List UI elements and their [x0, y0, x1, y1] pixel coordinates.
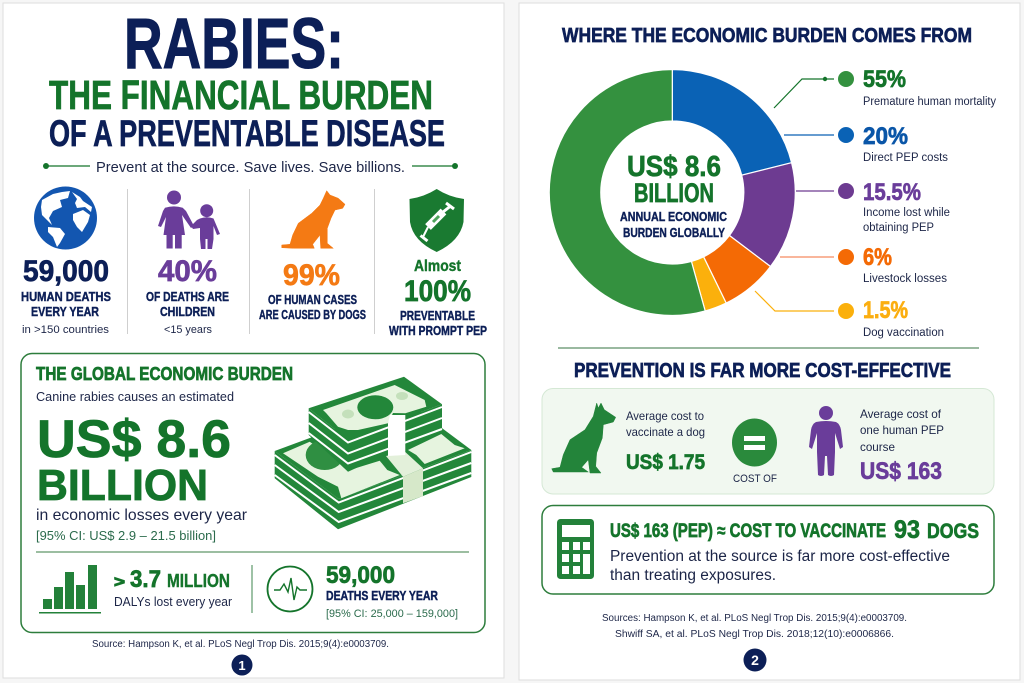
stat: human deaths	[21, 186, 111, 336]
stat: DALYs: DALYs lost every year	[114, 594, 233, 609]
donut centre label: BURDEN GLOBALLY	[623, 226, 726, 240]
legend: income lost: Income lost while	[863, 207, 950, 219]
legend: income lost: obtaining PEP	[863, 222, 934, 234]
legend: income lost	[796, 179, 950, 234]
page number 1	[232, 654, 252, 676]
legend: premature human mortality: Premature human mortality	[863, 96, 996, 108]
stat: dogs: OF HUMAN CASES	[268, 293, 357, 307]
stat: children: 40%	[158, 255, 217, 288]
callout text: US$ 163 (PEP) ≈ COST TO VACCINATE	[610, 521, 886, 542]
stat: human deaths: EVERY YEAR	[31, 304, 99, 319]
legend: income lost: 15.5%	[863, 179, 921, 206]
text: dog vaccination cost: US$ 1.75	[626, 451, 705, 474]
title: THE FINANCIAL BURDEN	[49, 72, 433, 118]
legend: direct PEP costs: Direct PEP costs	[863, 152, 948, 164]
stat: human deaths: HUMAN DEATHS	[21, 289, 111, 304]
sources	[602, 613, 907, 640]
panel: cost comparison	[542, 388, 994, 494]
icon: calculator	[557, 519, 594, 579]
callout text: 93	[894, 516, 920, 544]
text: PEP cost: course	[860, 440, 895, 454]
callout text	[610, 516, 979, 584]
icon: heartbeat circle	[268, 566, 312, 612]
stat: preventable: PREVENTABLE	[400, 309, 475, 323]
icon: orange dog	[282, 191, 345, 248]
stat: preventable	[389, 189, 487, 338]
stat: children: OF DEATHS ARE	[146, 289, 229, 304]
chart: donut	[549, 70, 795, 316]
panel: page 1	[3, 3, 504, 678]
donut centre label: BILLION	[634, 178, 714, 208]
chart: DALY bars icon	[39, 565, 101, 614]
stat: dogs: 99%	[283, 259, 340, 292]
sources: Sources: Hampson K, et al. PLoS Negl Trop Dis. 2015;9(4):e0003709.	[602, 613, 907, 624]
icon: equals	[732, 418, 777, 466]
legend: livestock losses: 6%	[863, 244, 892, 271]
stat: DALYs	[114, 566, 233, 609]
page number 2: 2	[751, 652, 759, 668]
heading: THE GLOBAL ECONOMIC BURDEN	[36, 363, 293, 384]
callout text: Prevention at the source is far more cost-effective	[610, 548, 950, 565]
text: intro: Canine rabies causes an estimated	[36, 389, 234, 404]
stat: deaths: [95% CI: 25,000 – 159,000]	[326, 608, 458, 620]
title: OF A PREVENTABLE DISEASE	[49, 113, 445, 154]
label: cost of: COST OF	[733, 473, 777, 485]
source: Source: Hampson K, et al. PLoS Negl Trop Dis. 2015;9(4):e0003709.	[92, 639, 389, 650]
text: PEP cost	[860, 407, 944, 485]
page number 1: 1	[238, 658, 246, 673]
icon: shield with syringe	[410, 189, 464, 252]
icon: adult and child	[158, 190, 220, 249]
text: losses: [95% CI: US$ 2.9 – 21.5 billion]	[36, 528, 216, 543]
stat: children: <15 years	[164, 324, 212, 336]
stat: DALYs: 3.7	[130, 566, 161, 593]
legend: livestock losses: Livestock losses	[863, 273, 947, 285]
title: RABIES:	[124, 5, 344, 84]
legend: livestock losses	[780, 244, 947, 285]
donut centre label: ANNUAL ECONOMIC	[620, 210, 727, 224]
donut centre label	[620, 151, 727, 240]
icon: globe	[34, 186, 97, 250]
text: PEP cost: US$ 163	[860, 458, 942, 485]
stat: children	[146, 190, 229, 336]
text: dog vaccination cost	[626, 409, 705, 474]
stat: DALYs: MILLION	[167, 571, 230, 591]
panel: global economic burden	[21, 354, 485, 632]
heading: prevention: PREVENTION IS FAR MORE COST-EFFECTIVE	[574, 359, 951, 382]
text: dog vaccination cost: Average cost to	[626, 409, 704, 423]
stat: preventable: Almost	[414, 258, 462, 275]
stat: children: CHILDREN	[160, 304, 215, 319]
legend: dog vaccination: 1.5%	[863, 297, 908, 324]
text: losses	[36, 507, 248, 543]
text: dog vaccination cost: vaccinate a dog	[626, 425, 705, 439]
stat: deaths: 59,000	[326, 562, 395, 589]
legend: premature human mortality	[774, 66, 996, 108]
stat: dogs	[259, 191, 366, 322]
stat: human deaths: in >150 countries	[22, 324, 110, 336]
icon: green dog	[552, 403, 616, 473]
legend: dog vaccination: Dog vaccination	[863, 327, 944, 339]
stat: DALYs: >	[114, 574, 125, 591]
stat: deaths	[326, 562, 458, 620]
legend: direct PEP costs: 20%	[863, 123, 908, 150]
big number: BILLION	[37, 461, 208, 510]
page number 2	[744, 648, 766, 672]
big number	[37, 410, 231, 510]
stat: preventable: 100%	[404, 275, 471, 308]
callout text: DOGS	[927, 520, 979, 543]
title	[49, 5, 445, 154]
icon: stack of money	[275, 377, 471, 529]
legend: direct PEP costs	[784, 123, 948, 164]
legend: dog vaccination	[755, 291, 944, 339]
panel: page 2	[519, 3, 1020, 680]
callout text: than treating exposures.	[610, 567, 776, 584]
icon: person	[809, 406, 843, 476]
tagline: Prevent at the source. Save lives. Save billions.	[96, 159, 405, 176]
stat: dogs: ARE CAUSED BY DOGS	[259, 308, 366, 322]
legend: premature human mortality: 55%	[863, 66, 906, 93]
text: PEP cost: Average cost of	[860, 407, 942, 421]
big number: US$ 8.6	[37, 410, 231, 469]
text: PEP cost: one human PEP	[860, 423, 944, 437]
panel: 93 dogs callout	[542, 506, 994, 594]
stat: preventable: WITH PROMPT PEP	[389, 324, 487, 338]
sources: Shwiff SA, et al. PLoS Negl Trop Dis. 2018;12(10):e0006866.	[615, 629, 894, 640]
text: losses: in economic losses every year	[36, 507, 248, 524]
donut centre label: US$ 8.6	[627, 151, 721, 183]
stat: deaths: DEATHS EVERY YEAR	[326, 589, 438, 603]
stat: human deaths: 59,000	[23, 255, 109, 288]
